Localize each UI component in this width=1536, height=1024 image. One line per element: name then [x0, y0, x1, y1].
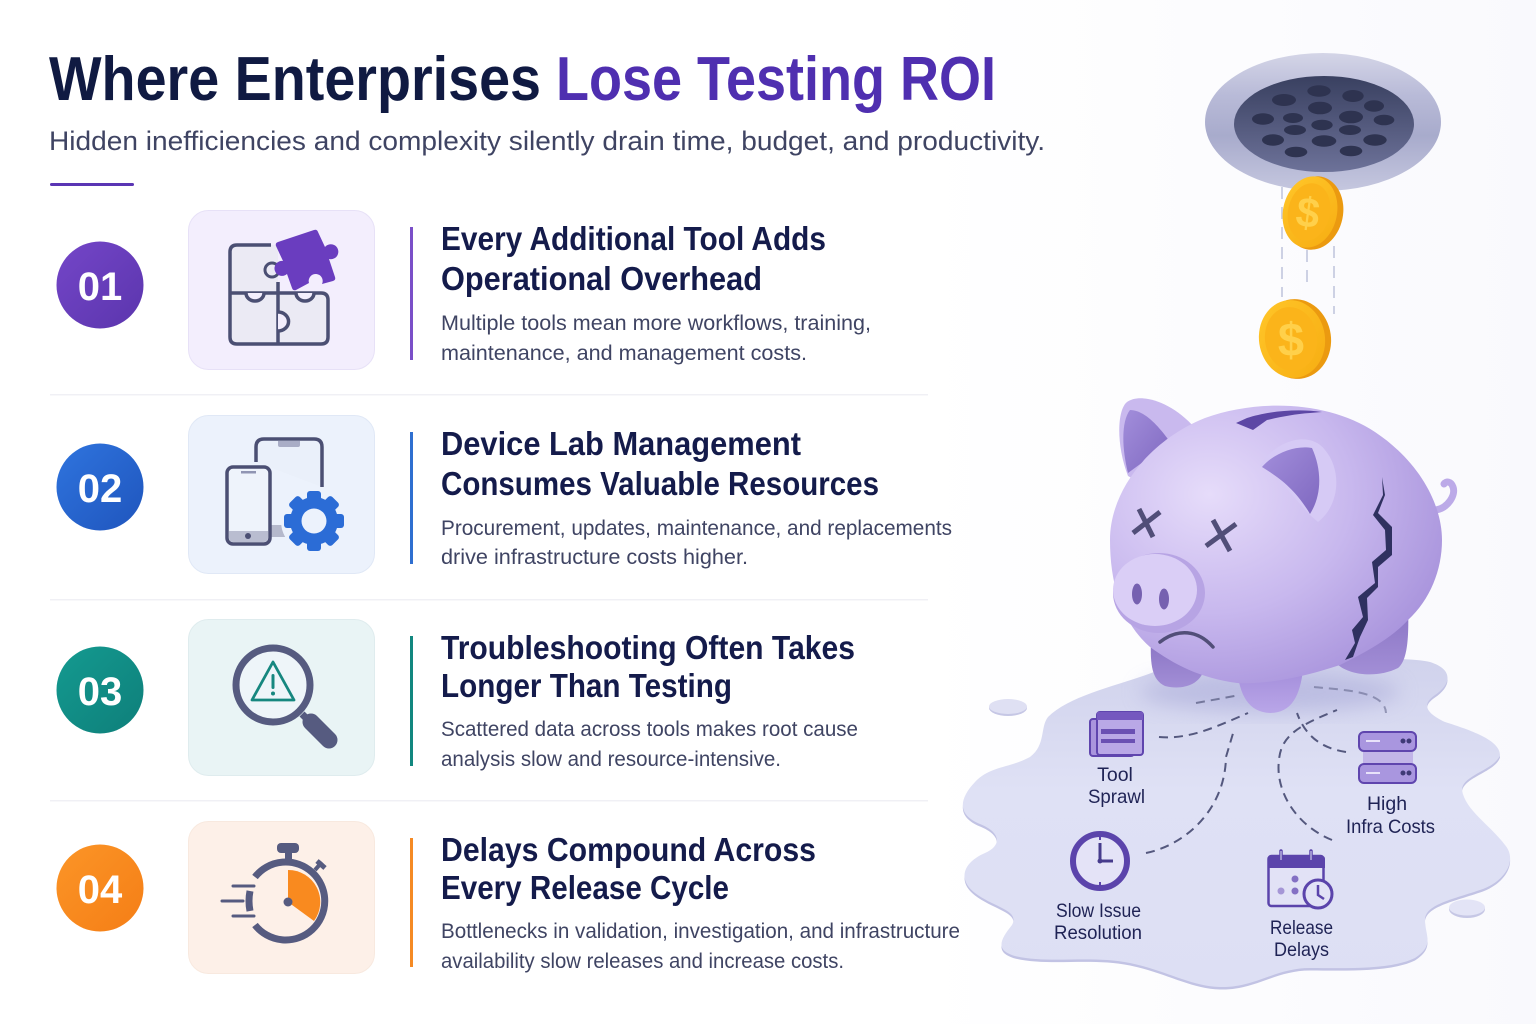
heading: Consumes Valuable Resources — [441, 465, 879, 502]
badge 02: 02 — [78, 467, 122, 511]
coin: upper: $ — [1293, 188, 1323, 237]
front leg — [1237, 670, 1303, 713]
puddle — [963, 659, 1510, 990]
description — [441, 718, 858, 771]
label: Sprawl — [1088, 786, 1145, 808]
description: drive infrastructure costs higher. — [441, 546, 748, 569]
label: High — [1367, 793, 1407, 815]
pig body — [1110, 406, 1442, 683]
label: Tool — [1097, 764, 1133, 786]
label: Release — [1270, 917, 1333, 939]
description: Scattered data across tools makes root cause — [441, 718, 858, 741]
badge 01: 01 — [78, 265, 122, 309]
back right leg — [1337, 605, 1408, 674]
back left ear — [1119, 398, 1195, 480]
description — [441, 517, 952, 569]
panel: item 04 — [56, 822, 960, 974]
heading: Troubleshooting Often Takes — [441, 629, 855, 666]
impact: slow issue resolution — [1054, 834, 1142, 944]
badge 01 — [56, 242, 144, 328]
pig tail — [1436, 482, 1454, 510]
impact: tool sprawl — [1088, 712, 1145, 808]
label: Infra Costs — [1346, 816, 1435, 838]
heading: Operational Overhead — [441, 260, 762, 297]
heading — [441, 425, 879, 502]
coin slot — [1236, 410, 1322, 430]
icon: devices and gear — [188, 416, 374, 574]
title — [49, 45, 996, 114]
icon: windows — [1090, 712, 1143, 756]
eyes — [1133, 509, 1236, 551]
description: analysis slow and resource-intensive. — [441, 748, 781, 771]
heading: Device Lab Management — [441, 425, 801, 462]
description: Bottlenecks in validation, investigation, and infrastructure — [441, 920, 960, 943]
frown — [1160, 633, 1213, 647]
title: Lose Testing ROI — [556, 45, 996, 114]
left front leg — [1151, 640, 1203, 687]
badge 02 — [56, 444, 144, 530]
badge 04 — [56, 844, 144, 932]
description: Procurement, updates, maintenance, and replacements — [441, 517, 952, 540]
icon: servers — [1359, 732, 1416, 783]
description: availability slow releases and increase costs. — [441, 950, 844, 973]
panel: item 02 — [56, 416, 952, 574]
label: Delays — [1274, 939, 1329, 961]
crack — [1345, 477, 1392, 660]
right ear — [1260, 439, 1336, 522]
heading: Delays Compound Across — [441, 831, 816, 868]
heading: Longer Than Testing — [441, 667, 732, 704]
badge 03 — [56, 646, 144, 734]
drain — [1205, 53, 1441, 191]
dashed leak lines — [1146, 687, 1386, 853]
snout — [1113, 553, 1205, 633]
coin: lower: $ — [1278, 313, 1304, 366]
icon: clock — [1073, 834, 1127, 888]
badge 03: 03 — [78, 670, 122, 714]
panel: item 01 — [56, 210, 871, 370]
badge 04: 04 — [78, 868, 123, 912]
impact: high infra costs — [1346, 732, 1435, 838]
subtitle: Hidden inefficiencies and complexity silently drain time, budget, and productivity. — [49, 126, 1045, 156]
heading — [441, 831, 816, 906]
icon: stopwatch — [188, 822, 374, 974]
panel: item 03 — [56, 620, 858, 776]
heading — [441, 220, 826, 297]
description — [441, 920, 960, 973]
icon: calendar and clock — [1268, 851, 1332, 908]
heading: Every Additional Tool Adds — [441, 220, 826, 257]
label — [1270, 917, 1333, 961]
icon: puzzle — [188, 210, 374, 370]
label: Resolution — [1054, 922, 1142, 944]
description: Multiple tools mean more workflows, training, — [441, 312, 871, 335]
description — [441, 312, 871, 365]
label — [1088, 764, 1145, 808]
coin: upper — [1276, 171, 1350, 255]
icon: magnifier with warning — [188, 620, 374, 776]
label — [1054, 900, 1142, 944]
coin: lower — [1254, 295, 1336, 383]
label — [1346, 793, 1435, 838]
label: Slow Issue — [1056, 900, 1141, 922]
falling dashes — [1282, 187, 1334, 314]
impact: release delays — [1268, 851, 1333, 961]
heading: Every Release Cycle — [441, 869, 729, 906]
title: Where Enterprises — [49, 45, 541, 114]
piggy bank — [1110, 398, 1442, 713]
heading — [441, 629, 855, 704]
description: maintenance, and management costs. — [441, 342, 807, 365]
